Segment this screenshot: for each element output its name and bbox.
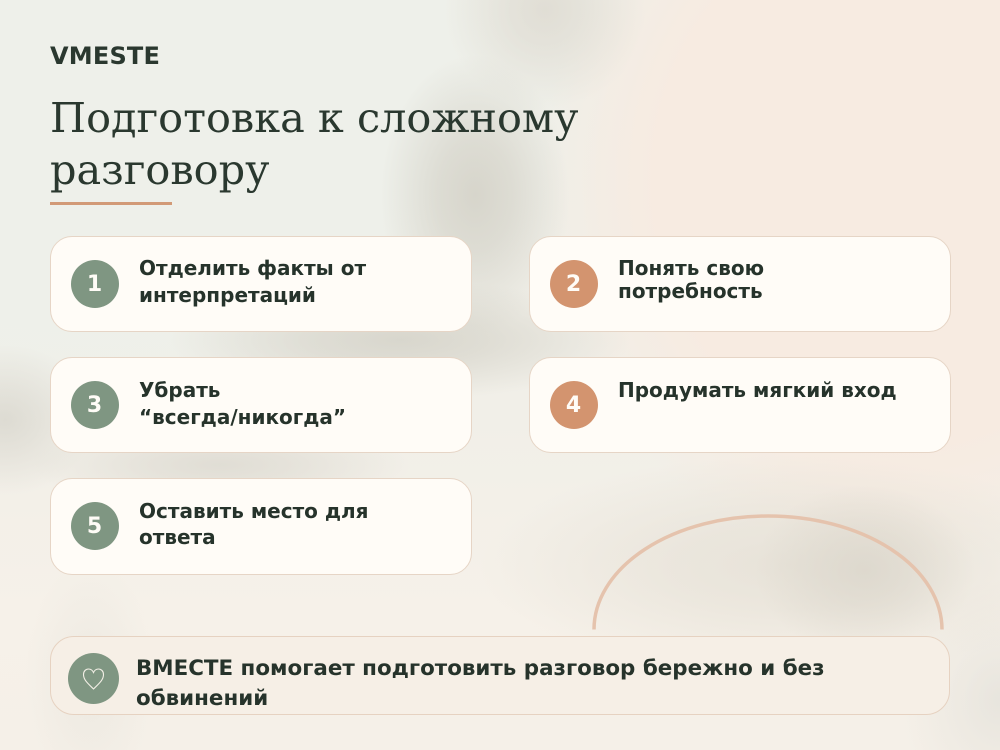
number badge 2: 2 [566, 272, 581, 297]
footer callout [50, 636, 950, 715]
title: разговору [50, 146, 269, 194]
card 2 text: Понять свою [618, 256, 764, 280]
card 5 [50, 478, 472, 575]
brand name: VMESTE [50, 42, 160, 70]
card 3 text [139, 378, 346, 428]
icon: heart [68, 653, 119, 704]
number badge 5 [71, 502, 119, 550]
footer text [136, 656, 825, 711]
number badge 1: 1 [87, 272, 102, 297]
card 4 [529, 357, 951, 453]
footer text: обвинений [136, 686, 268, 711]
card 1 text: интерпретаций [139, 282, 316, 306]
card 2 text: потребность [618, 279, 763, 303]
decorative arch [592, 514, 944, 630]
card 3 text: Убрать [139, 378, 220, 402]
number badge 4: 4 [566, 393, 581, 418]
number badge 4 [550, 381, 598, 429]
card 1 text [139, 256, 366, 306]
card 2 text [618, 256, 764, 303]
number badge 1 [71, 260, 119, 308]
card 5 text [139, 499, 369, 549]
number badge 3 [71, 381, 119, 429]
title: Подготовка к сложному [50, 94, 578, 142]
card 2 [529, 236, 951, 332]
number badge 2 [550, 260, 598, 308]
footer text: ВМЕСТЕ помогает подготовить разговор бережно и без [136, 656, 825, 681]
card 3 text: “всегда/никогда” [139, 404, 346, 428]
card 5 text: Оставить место для [139, 499, 369, 523]
number badge 5: 5 [87, 514, 102, 539]
card 5 text: ответа [139, 525, 216, 549]
number badge 3: 3 [87, 393, 102, 418]
card 4 text: Продумать мягкий вход [618, 378, 897, 402]
card 3 [50, 357, 472, 453]
card 1 text: Отделить факты от [139, 256, 366, 280]
card 1 [50, 236, 472, 332]
title [50, 94, 578, 194]
title underline [50, 202, 172, 205]
